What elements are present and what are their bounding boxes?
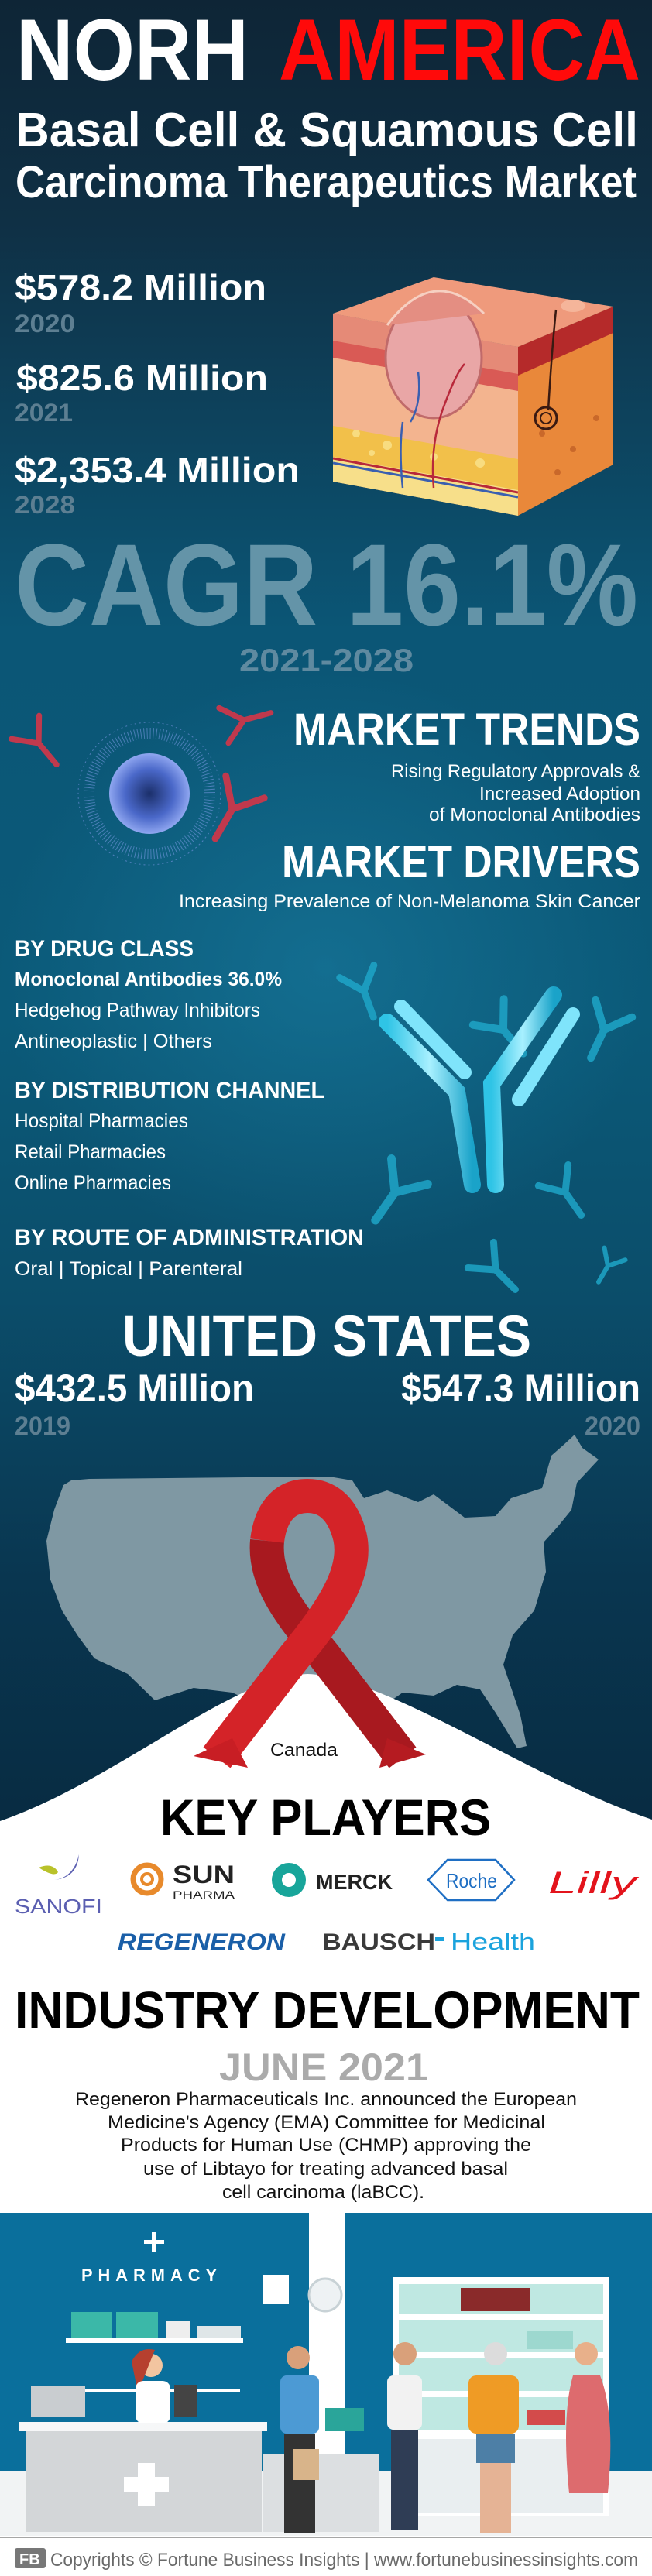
title bbox=[16, 2, 640, 98]
logo: bausch health: BAUSCH bbox=[322, 1929, 435, 1955]
title: NORH bbox=[16, 2, 249, 98]
segments: by drug class bbox=[15, 936, 282, 1052]
segments: by distribution channel: Online Pharmacies bbox=[15, 1172, 171, 1194]
development text bbox=[75, 2089, 577, 2203]
clock bbox=[309, 2279, 341, 2311]
segments: by distribution channel bbox=[15, 1078, 324, 1194]
segments: by distribution channel: BY DISTRIBUTION CHANNEL bbox=[15, 1078, 324, 1103]
label: Canada: Canada bbox=[270, 1740, 338, 1761]
logo: bausch health: Health bbox=[451, 1928, 535, 1955]
subtitle: Basal Cell & Squamous Cell bbox=[15, 104, 638, 157]
segments: by drug class: Hedgehog Pathway Inhibitors bbox=[15, 1000, 260, 1021]
logo: merck: MERCK bbox=[316, 1870, 393, 1894]
market trends: of Monoclonal Antibodies bbox=[429, 804, 640, 825]
illustration: pharmacy scene bbox=[0, 2213, 652, 2536]
logos bbox=[15, 1854, 640, 1955]
subtitle bbox=[15, 104, 638, 208]
logo: sanofi: SANOFI bbox=[15, 1895, 102, 1918]
pharmacy sign bbox=[81, 2232, 222, 2285]
market trends: Increased Adoption bbox=[479, 784, 640, 804]
segments: by drug class: BY DRUG CLASS bbox=[15, 936, 194, 962]
logo: sanofi bbox=[15, 1854, 102, 1918]
logo: roche: Roche bbox=[446, 1869, 497, 1892]
stats: market values: $2,353.4 Million bbox=[15, 450, 300, 490]
stats: market values: 2021 bbox=[15, 399, 73, 427]
logo: regeneron: REGENERON bbox=[118, 1929, 286, 1955]
stats: market values bbox=[15, 267, 300, 519]
development text: cell carcinoma (laBCC). bbox=[222, 2182, 424, 2203]
logo: roche bbox=[428, 1860, 514, 1900]
united states heading: 2020 bbox=[585, 1411, 640, 1441]
date: JUNE 2021 bbox=[219, 2046, 428, 2089]
segments: by drug class: Antineoplastic | Others bbox=[15, 1031, 212, 1052]
illustration: skin cross-section bbox=[333, 277, 613, 516]
development text: Products for Human Use (CHMP) approving the bbox=[121, 2135, 531, 2156]
united states heading: $432.5 Million bbox=[15, 1367, 254, 1410]
market drivers: Increasing Prevalence of Non-Melanoma Skin Cancer bbox=[179, 891, 640, 912]
segments: by route: Oral | Topical | Parenteral bbox=[15, 1258, 242, 1280]
pharmacy sign: PHARMACY bbox=[81, 2266, 222, 2285]
right shelves bbox=[393, 2277, 609, 2516]
key players heading: KEY PLAYERS bbox=[160, 1789, 491, 1846]
segments: by distribution channel: Retail Pharmacies bbox=[15, 1141, 166, 1163]
counter bbox=[19, 2422, 267, 2431]
background bbox=[0, 0, 652, 1858]
customer: man blue shirt bbox=[280, 2346, 319, 2533]
market trends: Rising Regulatory Approvals & bbox=[391, 761, 640, 782]
market drivers bbox=[179, 837, 640, 912]
footer bbox=[0, 2537, 652, 2571]
customer: man white shirt bbox=[387, 2342, 422, 2530]
logo: sun pharma: PHARMA bbox=[173, 1888, 235, 1901]
pharmacist bbox=[139, 2354, 163, 2377]
logo: bausch health bbox=[322, 1928, 535, 1955]
customer: pregnant woman bbox=[566, 2342, 610, 2493]
map: united states bbox=[46, 1435, 599, 1748]
development text: Medicine's Agency (EMA) Committee for Medicinal bbox=[108, 2112, 545, 2133]
segments: by route: BY ROUTE OF ADMINISTRATION bbox=[15, 1225, 364, 1250]
logo: merck bbox=[272, 1863, 393, 1897]
segments: by distribution channel: Hospital Pharmacies bbox=[15, 1110, 188, 1132]
development text: Regeneron Pharmaceuticals Inc. announced the European bbox=[75, 2089, 577, 2110]
customer: woman orange bbox=[468, 2342, 519, 2533]
development text: use of Libtayo for treating advanced basal bbox=[143, 2159, 508, 2180]
stats: market values: $578.2 Million bbox=[15, 267, 266, 307]
stats: market values: $825.6 Million bbox=[16, 358, 268, 398]
logo: sun pharma: SUN bbox=[173, 1861, 235, 1888]
left shelf bbox=[66, 2338, 243, 2343]
icon: red antibodies bbox=[12, 695, 276, 849]
white hill background bbox=[0, 1674, 652, 2576]
united states heading: $547.3 Million bbox=[401, 1367, 640, 1410]
icon: virus bbox=[78, 722, 221, 865]
stats: market values: 2028 bbox=[15, 491, 75, 519]
CAGR: 2021-2028 bbox=[239, 642, 414, 678]
stats: market values: 2020 bbox=[15, 310, 75, 338]
market trends bbox=[293, 705, 640, 825]
icon: red ribbon bbox=[194, 1496, 426, 1768]
icon: large antibody bbox=[340, 966, 632, 1302]
footer: FB bbox=[19, 2551, 40, 2568]
segments: by route bbox=[15, 1225, 364, 1280]
united states heading: 2019 bbox=[15, 1411, 70, 1441]
logo: lilly: Lilly bbox=[548, 1866, 640, 1900]
united states heading: UNITED STATES bbox=[122, 1304, 531, 1368]
logo: sun pharma bbox=[133, 1861, 235, 1901]
united states heading bbox=[15, 1304, 640, 1441]
segments: by drug class: Monoclonal Antibodies 36.0% bbox=[15, 969, 282, 990]
